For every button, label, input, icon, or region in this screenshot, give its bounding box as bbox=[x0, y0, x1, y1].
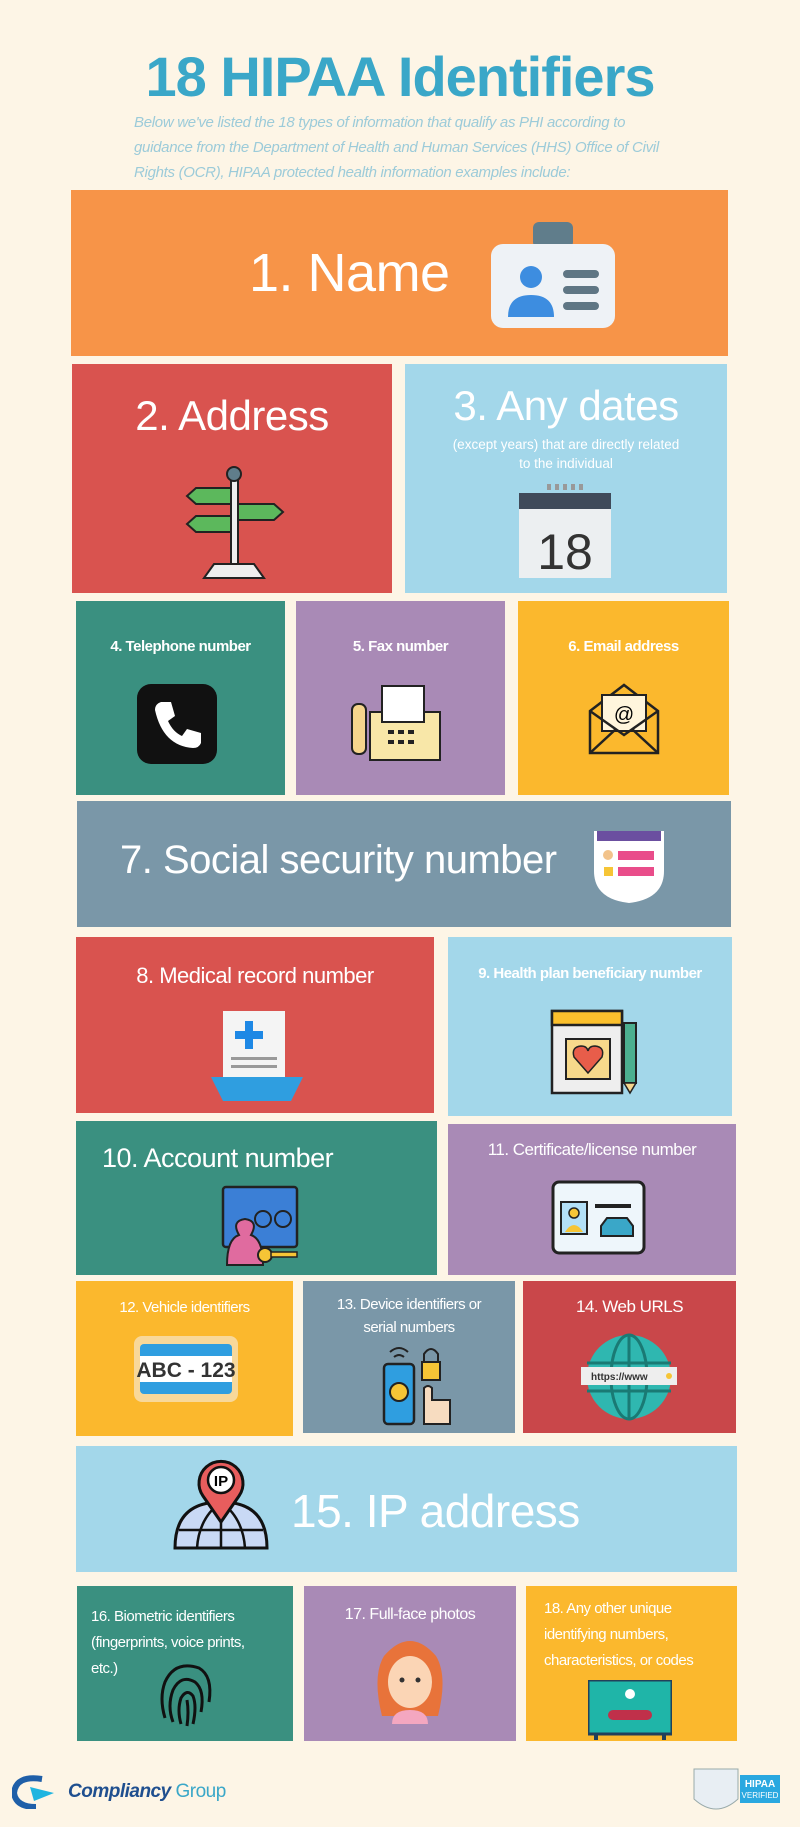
icon: fax machine bbox=[351, 685, 441, 761]
heading: medical record: 8. Medical record number bbox=[136, 963, 374, 988]
panel: 18 other unique bbox=[526, 1586, 737, 1741]
heading: device: 13. Device identifiers or bbox=[337, 1296, 481, 1313]
heading: web urls: 14. Web URLS bbox=[576, 1297, 683, 1316]
heading: health plan: 9. Health plan beneficiary number bbox=[478, 965, 702, 982]
panel: 13 device bbox=[303, 1281, 515, 1433]
panel: 5 fax bbox=[296, 601, 505, 795]
heading: face photos: 17. Full-face photos bbox=[345, 1606, 475, 1623]
panel: 15 ip address bbox=[76, 1446, 737, 1572]
panel: 14 web urls bbox=[523, 1281, 736, 1433]
panel: 7 social security bbox=[77, 801, 731, 927]
icon: phone and hand bbox=[382, 1347, 451, 1426]
panel: 6 email bbox=[518, 601, 729, 795]
footer badge: hipaa verified: HIPAA bbox=[745, 1779, 775, 1790]
icon: id card bbox=[491, 222, 615, 328]
footer badge: hipaa verified: VERIFIED bbox=[742, 1791, 779, 1800]
icon: globe with url bbox=[581, 1334, 677, 1420]
heading: telephone: 4. Telephone number bbox=[110, 638, 251, 655]
icon: phone bbox=[137, 684, 217, 764]
heading: other unique: characteristics, or codes bbox=[544, 1652, 693, 1669]
panel: 3 dates bbox=[405, 364, 727, 593]
icon: globe with url: https://www bbox=[591, 1372, 648, 1383]
heading: other unique: 18. Any other unique bbox=[544, 1600, 672, 1617]
icon: ip location globe: IP bbox=[214, 1473, 228, 1490]
heading: device: serial numbers bbox=[363, 1319, 455, 1336]
heading: other unique bbox=[544, 1600, 694, 1669]
heading: email: 6. Email address bbox=[568, 638, 679, 655]
text: dates note bbox=[453, 437, 679, 471]
heading: vehicle: 12. Vehicle identifiers bbox=[119, 1299, 250, 1316]
heading: ip address: 15. IP address bbox=[291, 1485, 580, 1537]
icon: license plate: ABC - 123 bbox=[136, 1359, 236, 1382]
panel: 10 account bbox=[76, 1121, 437, 1275]
icon: signpost bbox=[186, 466, 284, 579]
heading: biometric: (fingerprints, voice prints, bbox=[91, 1634, 245, 1651]
icon: envelope: @ bbox=[614, 704, 634, 726]
panel: 2 address bbox=[72, 364, 392, 593]
heading: account: 10. Account number bbox=[102, 1143, 333, 1173]
footer logo: compliancy group bbox=[12, 1775, 226, 1809]
panel: 8 medical record bbox=[76, 937, 434, 1113]
icon: account key bbox=[222, 1186, 298, 1266]
heading: address: 2. Address bbox=[135, 392, 329, 439]
heading: biometric: etc.) bbox=[91, 1660, 118, 1677]
subtitle text: Below we've listed the 18 types of information that qualify as PHI according to guidance from the Department of Health and Human Services (HHS) Office of Civil Rights (OCR), HIPAA protected health information examples include: bbox=[134, 114, 659, 181]
heading: biometric bbox=[91, 1608, 245, 1677]
panel: 11 certificate bbox=[448, 1124, 736, 1275]
panel: 1 name bbox=[71, 190, 728, 356]
text: dates note: (except years) that are directly related bbox=[453, 437, 679, 452]
panel: 16 biometric bbox=[77, 1586, 293, 1741]
text: dates note: to the individual bbox=[519, 456, 613, 471]
icon: secure profile shield bbox=[594, 831, 664, 903]
icon: login screen bbox=[588, 1680, 672, 1740]
icon: license plate bbox=[134, 1336, 238, 1402]
heading: other unique: identifying numbers, bbox=[544, 1626, 668, 1643]
footer logo: compliancy group: Compliancy Group bbox=[68, 1781, 226, 1802]
panel: 9 health plan bbox=[448, 937, 732, 1116]
icon: calendar 18 bbox=[519, 484, 611, 578]
heading: biometric: 16. Biometric identifiers bbox=[91, 1608, 234, 1625]
icon: ip location globe bbox=[174, 1460, 268, 1550]
icon: license card bbox=[552, 1180, 646, 1254]
icon: envelope bbox=[588, 683, 660, 754]
panel: 12 vehicle bbox=[76, 1281, 293, 1436]
icon: face bbox=[377, 1641, 443, 1724]
heading: ssn: 7. Social security number bbox=[120, 838, 557, 882]
icon: calendar heart bbox=[550, 1010, 638, 1094]
heading: device bbox=[337, 1296, 482, 1336]
title: 18 HIPAA Identifiers bbox=[145, 45, 655, 108]
heading: any dates: 3. Any dates bbox=[453, 382, 679, 429]
heading: fax: 5. Fax number bbox=[353, 638, 448, 655]
panel: 4 telephone bbox=[76, 601, 285, 795]
icon: medical folder bbox=[211, 1011, 303, 1101]
icon: fingerprint bbox=[160, 1664, 212, 1726]
heading: certificate: 11. Certificate/license number bbox=[488, 1140, 696, 1159]
panel: 17 face photos bbox=[304, 1586, 516, 1741]
heading: name: 1. Name bbox=[249, 243, 450, 303]
footer badge: hipaa verified bbox=[694, 1768, 780, 1810]
